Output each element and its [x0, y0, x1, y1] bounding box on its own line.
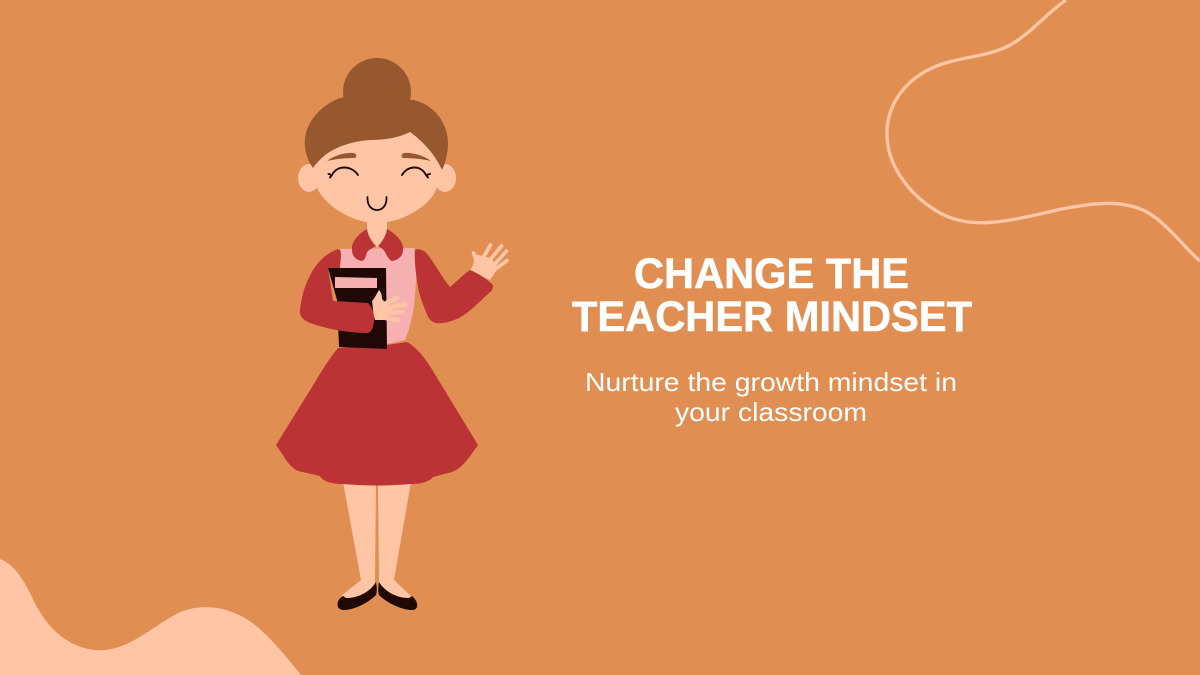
neck — [367, 218, 387, 248]
mouth — [367, 197, 387, 210]
title: TEACHER MINDSET — [572, 293, 972, 341]
left hand — [372, 290, 405, 320]
title: CHANGE THE — [634, 250, 909, 298]
right hand — [470, 245, 507, 280]
legs — [341, 482, 412, 601]
subtitle: Nurture the growth mindset in — [585, 367, 957, 397]
illustration: teacher — [276, 58, 507, 610]
ears — [298, 164, 456, 192]
skirt — [276, 342, 478, 486]
collar — [352, 229, 403, 261]
blouse — [340, 248, 416, 345]
title — [572, 250, 972, 341]
right sleeve — [415, 249, 493, 323]
decorative curve: top right — [887, 0, 1200, 261]
book — [328, 268, 387, 349]
face — [313, 125, 442, 223]
decorative blob: bottom left — [0, 559, 301, 675]
subtitle: your classroom — [675, 397, 867, 427]
hair — [305, 97, 448, 170]
subtitle — [585, 367, 957, 427]
bun — [343, 58, 411, 126]
left sleeve — [300, 249, 374, 333]
eyes — [328, 168, 430, 178]
shoes — [337, 582, 417, 610]
eyebrows — [327, 153, 431, 161]
